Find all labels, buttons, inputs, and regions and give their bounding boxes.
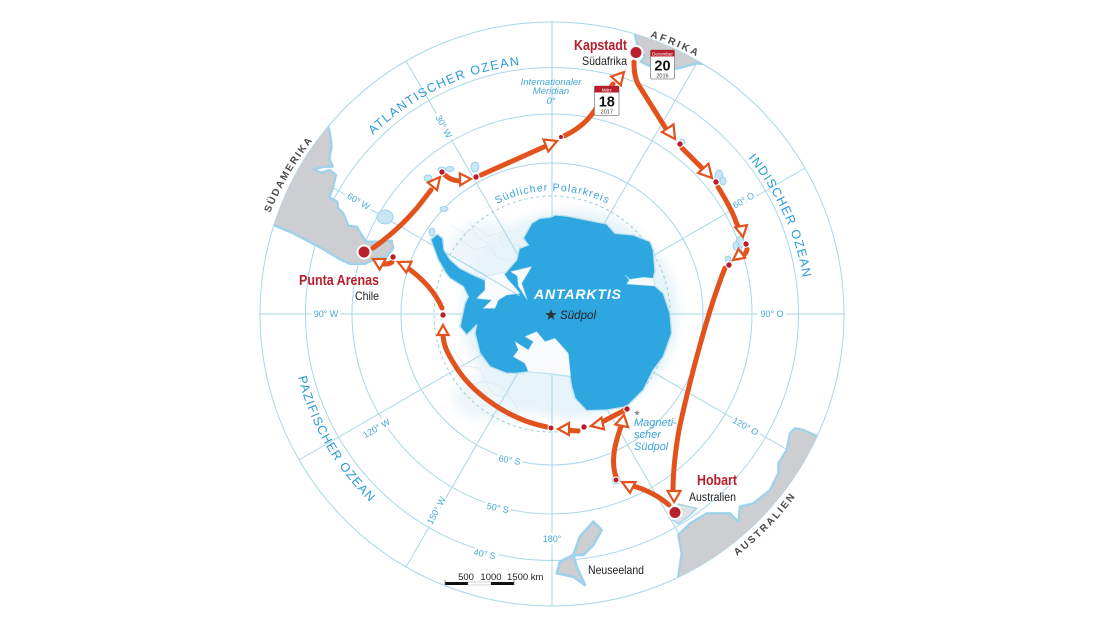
label: Südlicher Polarkreis: Südlicher Polarkreis: [495, 184, 609, 204]
label: Hobart: Australien: [689, 490, 736, 504]
ocean label: Atlantischer Ozean: ATLANTISCHER OZEAN: [370, 56, 518, 135]
grid labels: 90° O: [760, 309, 784, 319]
icon: star South Pole: [545, 309, 557, 320]
arrowheads: [370, 68, 749, 502]
grid labels: 150° W: [425, 495, 448, 526]
graticule: [260, 22, 844, 606]
label: Kapstadt: [574, 37, 627, 68]
ice texture: [450, 222, 520, 417]
grid labels: 60° W: [345, 191, 372, 212]
label: Kapstadt: Südafrika: [582, 54, 627, 68]
label: Afrika: AFRIKA: [650, 31, 697, 56]
land: Tasmanien: [673, 504, 697, 524]
islands: [377, 139, 744, 484]
calendar: 20 December 2016: [650, 50, 674, 79]
grid labels: 40° S: [473, 547, 496, 561]
grid labels: 60° O: [731, 190, 756, 211]
label: Südpol: Südpol: [560, 310, 596, 322]
land: Australien: [677, 427, 818, 578]
port: Kapstadt marker: [630, 46, 642, 59]
scale bar: [445, 572, 544, 585]
Ronne meridian: [452, 256, 520, 296]
sea-ice glow: [448, 210, 678, 422]
land: Afrika: [634, 34, 704, 70]
calendar: 18 März 2017: 18: [599, 94, 615, 110]
heading: Internationaler Meridian: Meridian: [533, 86, 569, 97]
label: Hobart: [689, 472, 737, 504]
label: Punta Arenas: [299, 272, 379, 303]
land: Südamerika: [274, 126, 394, 266]
label: Magnetischer Südpol: [634, 410, 677, 453]
grid labels: 120° W: [361, 416, 392, 440]
label: Antarktis: ANTARKTIS: [533, 286, 622, 302]
label: Neuseeland: Neuseeland: [588, 563, 644, 577]
route lines: [373, 62, 747, 505]
calendar: 18 März 2017: 2017: [601, 110, 613, 116]
label: Südamerika: SÜDAMERIKA: [264, 138, 312, 212]
heading: Internationaler Meridian: Internationaler: [521, 77, 582, 88]
calendar: 20 December 2016: 2016: [656, 73, 669, 79]
grid labels: 180°: [543, 534, 562, 544]
label: Kapstadt: Kapstadt: [574, 37, 627, 54]
label: Hobart: Hobart: [697, 472, 737, 489]
label: Magnetischer Südpol: Magneti-: [634, 417, 677, 429]
ice shelves: [477, 267, 655, 376]
continent: Antarktis: [431, 215, 672, 411]
label: Magnetischer Südpol: Südpol: [634, 441, 669, 453]
calendar: 18 März 2017: [594, 86, 619, 116]
grid labels: 120° O: [731, 415, 760, 438]
grid labels: 50° S: [486, 501, 509, 515]
label: Australien: AUSTRALIEN: [734, 493, 794, 556]
label: Punta Arenas: Chile: [355, 289, 379, 303]
ocean label: Pazifischer Ozean: PAZIFISCHER OZEAN: [298, 376, 376, 502]
port: Punta Arenas marker: [358, 246, 370, 258]
heading: Internationaler Meridian: [521, 77, 582, 107]
calendar: 20 December 2016: December: [652, 51, 673, 56]
heading: Internationaler Meridian: 0°: [546, 96, 556, 107]
ocean label: Indischer Ozean: INDISCHER OZEAN: [748, 153, 812, 276]
grid labels: 60° S: [498, 453, 521, 467]
calendar: 20 December 2016: 20: [654, 58, 671, 74]
scale bar: 1500 km: [507, 572, 544, 583]
stop dots: [390, 134, 749, 483]
polar map of the Antarctic voyage: [260, 22, 844, 606]
scale bar: 1000: [480, 572, 502, 583]
grid labels: 90° W: [314, 309, 339, 319]
calendar: 18 März 2017: März: [602, 87, 613, 92]
scale bar: 500: [458, 572, 474, 583]
land: Neuseeland: [557, 522, 602, 585]
port: Hobart marker: [668, 506, 682, 519]
grid labels: 30° W: [433, 113, 454, 140]
label: Magnetischer Südpol: scher: [634, 429, 662, 441]
grid labels: [314, 113, 784, 561]
label: Punta Arenas: Punta Arenas: [299, 272, 379, 289]
